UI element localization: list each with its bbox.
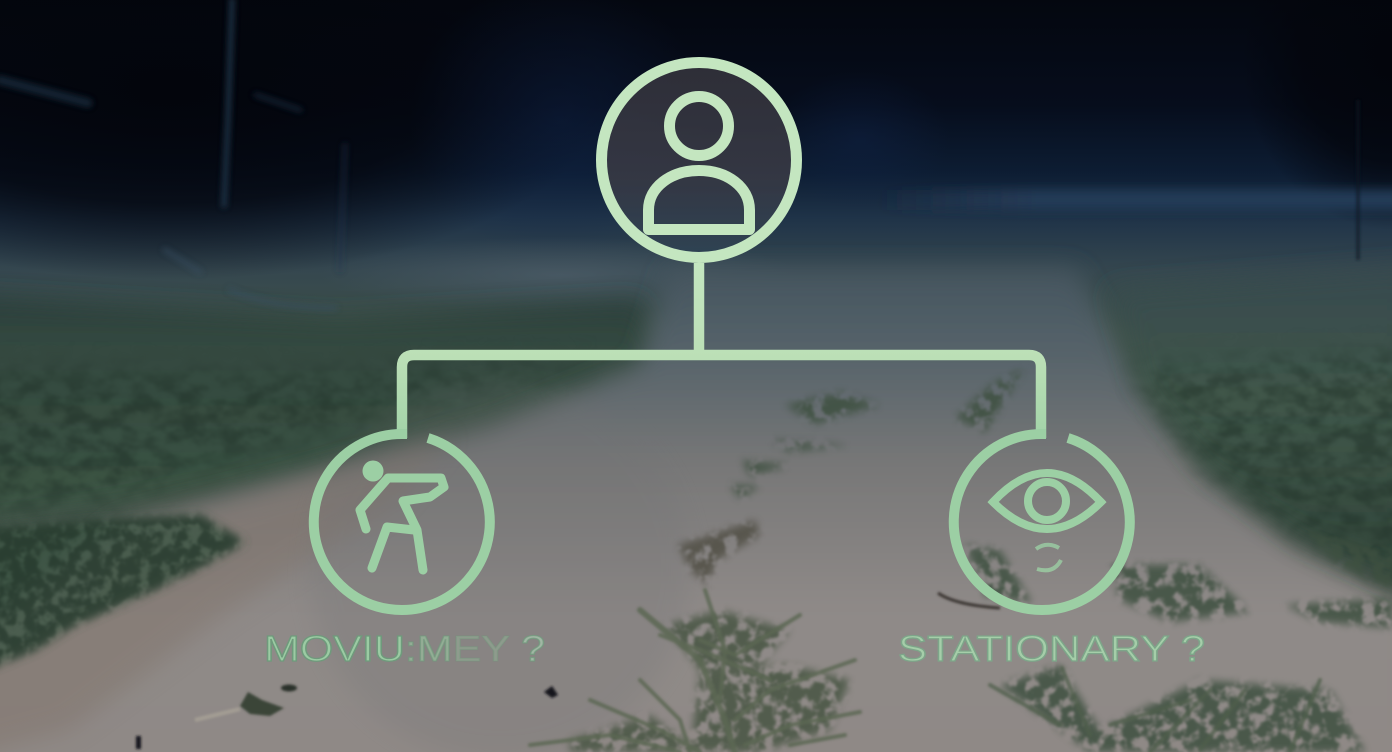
node ring with gap	[954, 434, 1130, 610]
label: stationary: STATIONARY ?	[898, 628, 1205, 669]
plant: bottom right stems	[990, 668, 1320, 752]
right node: stationary	[954, 434, 1130, 610]
node ring with gap	[314, 434, 490, 610]
road surface	[0, 268, 1392, 752]
debris on road	[136, 593, 1000, 749]
label: moving: MOVIU :MEY ?	[264, 628, 545, 669]
warm sand shoulder	[0, 435, 450, 752]
grass clump lower left	[0, 515, 245, 672]
node circle	[602, 62, 796, 258]
shaded road band	[310, 380, 690, 752]
icon: eye	[993, 473, 1101, 529]
connector tree	[402, 263, 1041, 438]
left node: moving	[314, 434, 490, 610]
icon: walking figure	[360, 460, 444, 570]
mottled grass texture, right	[1135, 350, 1392, 590]
icon: small broken circle	[1036, 545, 1061, 570]
horizon mist	[320, 190, 1392, 313]
mottled grass texture, left	[0, 360, 600, 515]
dark tree line	[0, 0, 1392, 280]
icon: person	[648, 96, 750, 230]
top node: person	[602, 62, 796, 258]
faint trees	[0, 0, 345, 308]
right grass	[1110, 265, 1392, 595]
centre strip weeds	[678, 368, 1392, 752]
left grass	[0, 295, 660, 525]
plant: bottom centre	[530, 590, 860, 752]
